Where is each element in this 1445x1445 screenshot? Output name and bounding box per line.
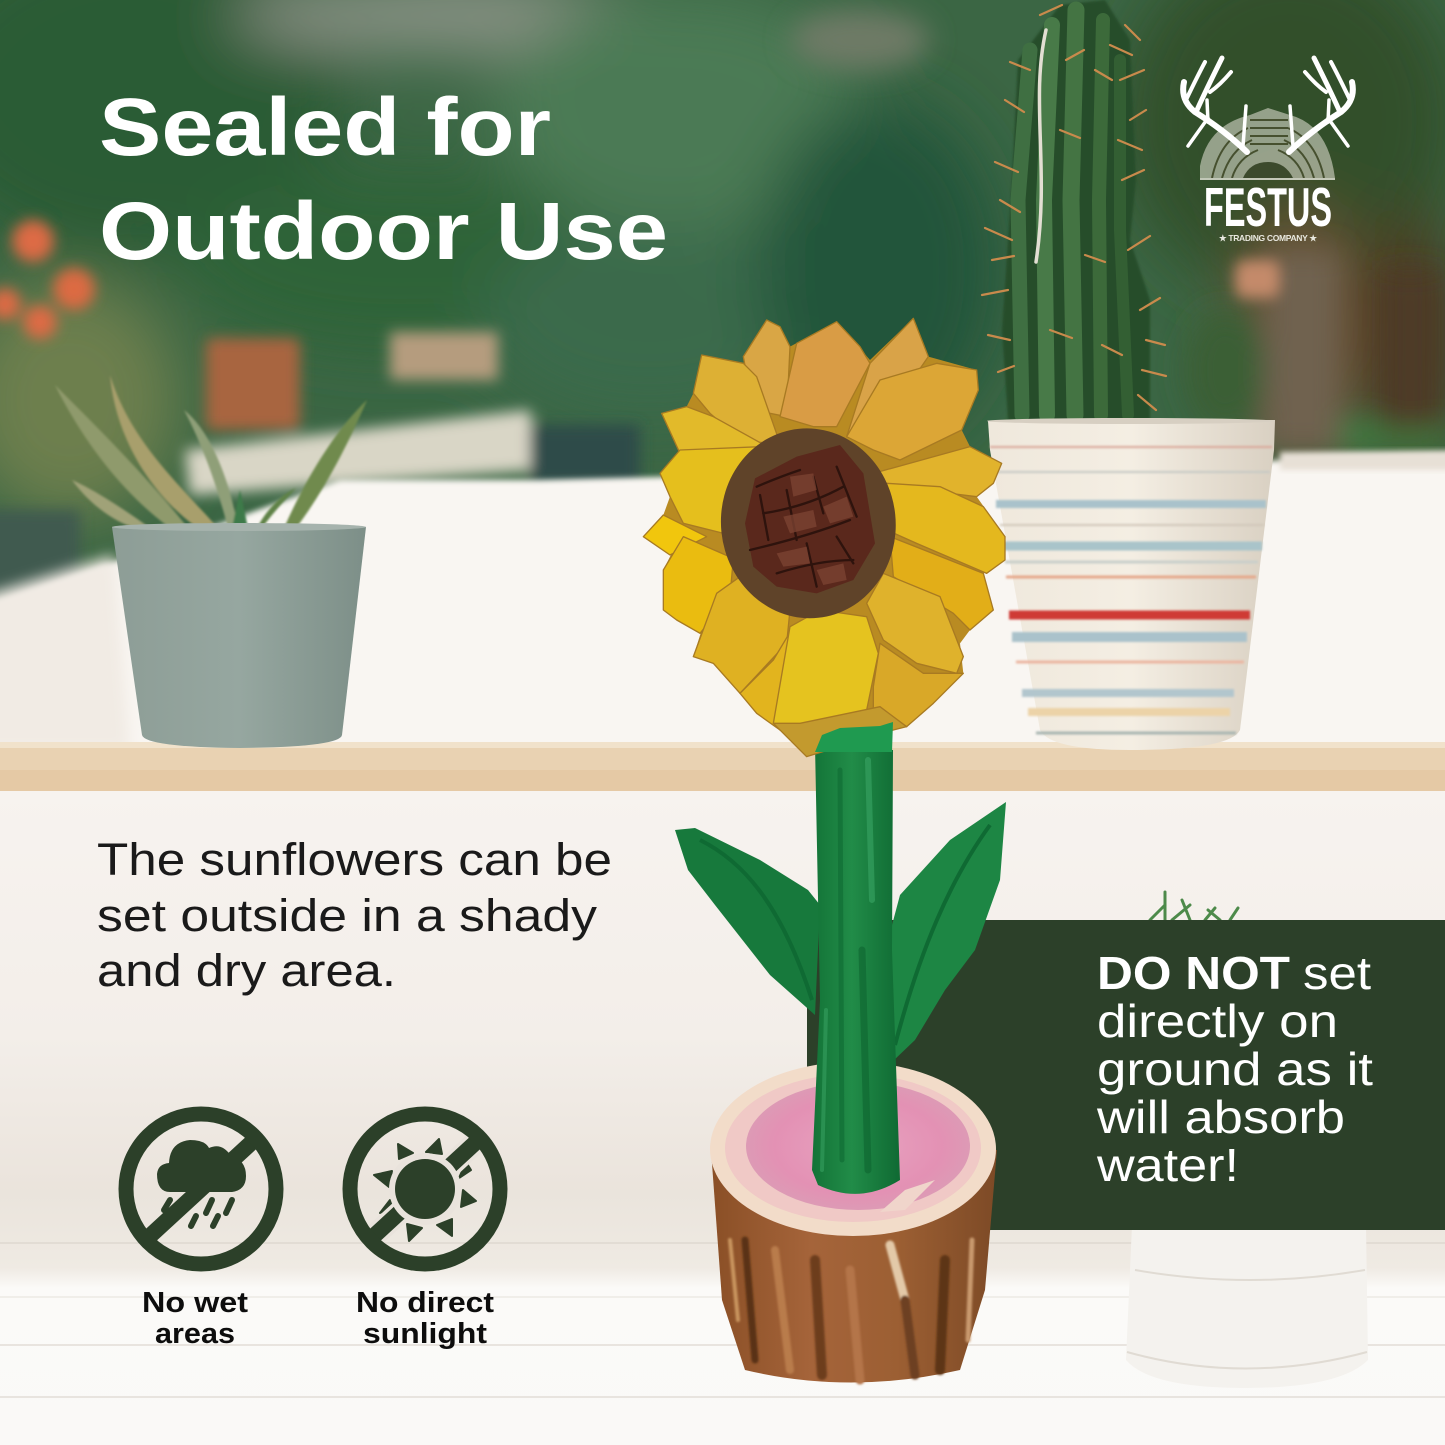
label: no direct sunlight: sunlight bbox=[363, 1318, 487, 1350]
description text: set outside in a shady bbox=[97, 890, 598, 941]
stump emblem bbox=[1200, 108, 1335, 178]
cactus bbox=[982, 0, 1166, 420]
antlers bbox=[1183, 58, 1353, 152]
left leaf bbox=[675, 828, 820, 1015]
wordmark: FESTUS bbox=[1204, 176, 1332, 238]
callout text: water! bbox=[1096, 1139, 1239, 1191]
label: no wet areas: No wet bbox=[142, 1287, 248, 1319]
cloud bbox=[157, 1140, 246, 1192]
sun rays bbox=[374, 1139, 476, 1241]
label: no direct sunlight: No direct bbox=[356, 1287, 494, 1319]
sunflower head bbox=[643, 318, 1005, 757]
sun disc bbox=[395, 1159, 455, 1219]
grey-green pot bbox=[112, 523, 366, 748]
white terrace surface bbox=[0, 450, 1445, 780]
flower centre bbox=[712, 420, 905, 627]
raindrops bbox=[164, 1200, 232, 1226]
main stem bbox=[812, 745, 900, 1194]
flower silhouette bbox=[643, 318, 1005, 757]
seed grid bbox=[750, 467, 857, 587]
white wall bbox=[0, 791, 1445, 1201]
blurred garden background bbox=[0, 0, 1445, 640]
prohibition band bbox=[151, 1143, 251, 1235]
stem collar bbox=[815, 722, 893, 752]
title: Sealed for bbox=[99, 82, 551, 173]
white plank table bbox=[0, 1192, 1445, 1445]
tan ledge bbox=[0, 742, 1445, 792]
wooden log base bbox=[710, 1062, 997, 1382]
description text: The sunflowers can be bbox=[97, 834, 612, 885]
small plant behind panel bbox=[1150, 892, 1238, 920]
striped pot bbox=[987, 418, 1275, 750]
white pot bbox=[1126, 1225, 1368, 1388]
callout text: will absorb bbox=[1096, 1091, 1345, 1143]
callout text: directly on bbox=[1097, 995, 1338, 1047]
title: Outdoor Use bbox=[99, 186, 668, 277]
callout text: ground as it bbox=[1097, 1043, 1373, 1095]
callout text: DO NOT bbox=[1097, 947, 1290, 999]
right leaf bbox=[888, 802, 1006, 1062]
icon: no wet areas bbox=[126, 1114, 276, 1264]
sunflower stem and leaves bbox=[675, 745, 1006, 1194]
logo: Festus Trading Company bbox=[1183, 58, 1353, 243]
icon: no direct sunlight bbox=[350, 1114, 500, 1264]
tagline: ★ TRADING COMPANY ★ bbox=[1219, 233, 1318, 243]
aloe plant bbox=[55, 375, 367, 528]
label: no wet areas: areas bbox=[155, 1318, 235, 1350]
dark green callout panel bbox=[807, 920, 1445, 1230]
back petals bbox=[643, 318, 1005, 757]
callout text: set bbox=[1303, 947, 1371, 999]
description text: and dry area. bbox=[97, 945, 396, 996]
